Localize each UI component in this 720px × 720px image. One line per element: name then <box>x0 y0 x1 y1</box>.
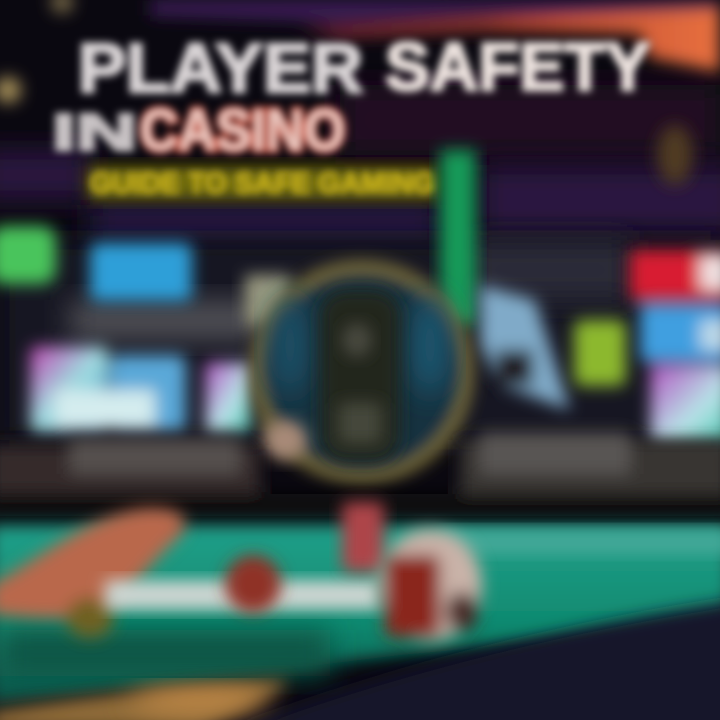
top orange band <box>150 0 720 72</box>
white cards strip <box>105 580 380 610</box>
hand <box>0 508 185 638</box>
casino table <box>0 525 720 705</box>
pale tile beside ring <box>245 275 290 325</box>
corner sparkles <box>0 0 693 185</box>
yellow subtitle bar: GUIDE TO SAFE GAMING <box>90 167 435 200</box>
chip: tall stack <box>342 502 384 572</box>
counter band <box>0 432 720 516</box>
chip: right stack <box>378 529 482 641</box>
right tile stack <box>630 250 720 443</box>
title <box>52 29 650 163</box>
right panel: light blue <box>480 285 570 410</box>
left tile: blue <box>90 243 192 301</box>
title: IN <box>52 104 137 162</box>
title: PLAYER <box>78 29 363 107</box>
magnifier ring with figure <box>256 266 468 478</box>
green vertical bar <box>440 150 476 325</box>
left tile: green <box>0 226 56 284</box>
left tiles: pink and cyan <box>30 346 251 432</box>
right tile: lime <box>574 320 626 386</box>
chip: left <box>225 555 281 613</box>
title: SAFETY <box>385 29 650 105</box>
foreground dark rail <box>0 600 720 720</box>
title: CASINO <box>140 98 345 163</box>
